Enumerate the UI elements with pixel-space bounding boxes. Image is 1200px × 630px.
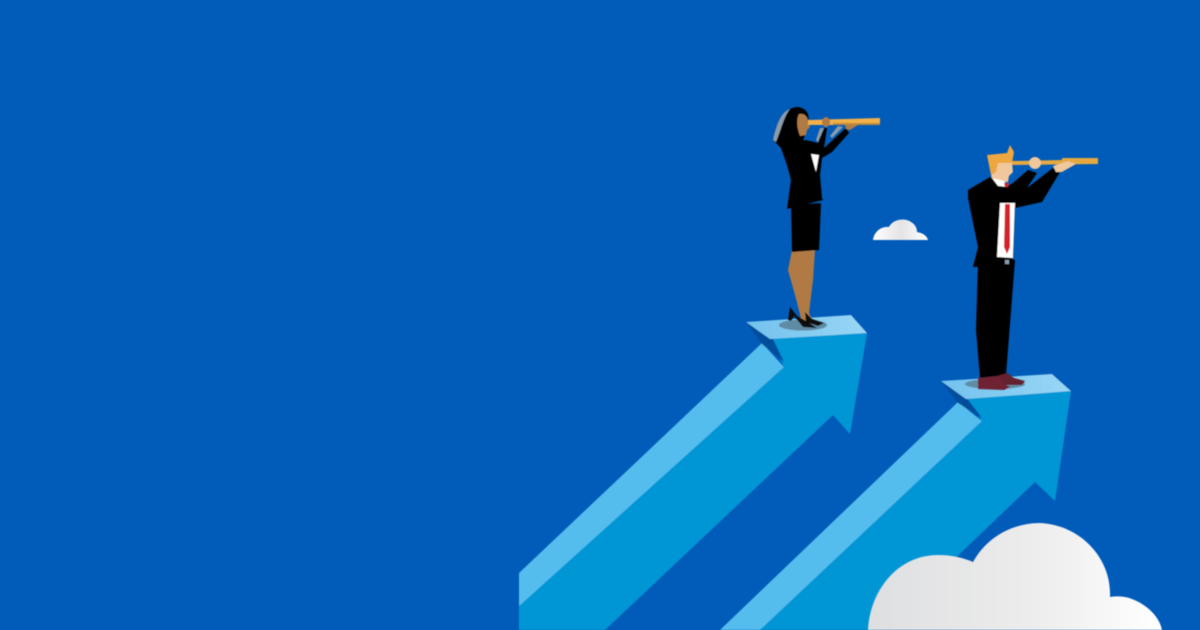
telescope <box>1012 158 1098 165</box>
icon: large cloud <box>868 523 1162 630</box>
icon: small cloud <box>873 220 928 240</box>
arrow: right rising arrow <box>720 374 1071 630</box>
figure: woman with telescope <box>773 107 880 330</box>
figure: man with telescope <box>965 145 1098 390</box>
arrow: left rising arrow <box>519 315 867 630</box>
telescope <box>808 118 880 125</box>
